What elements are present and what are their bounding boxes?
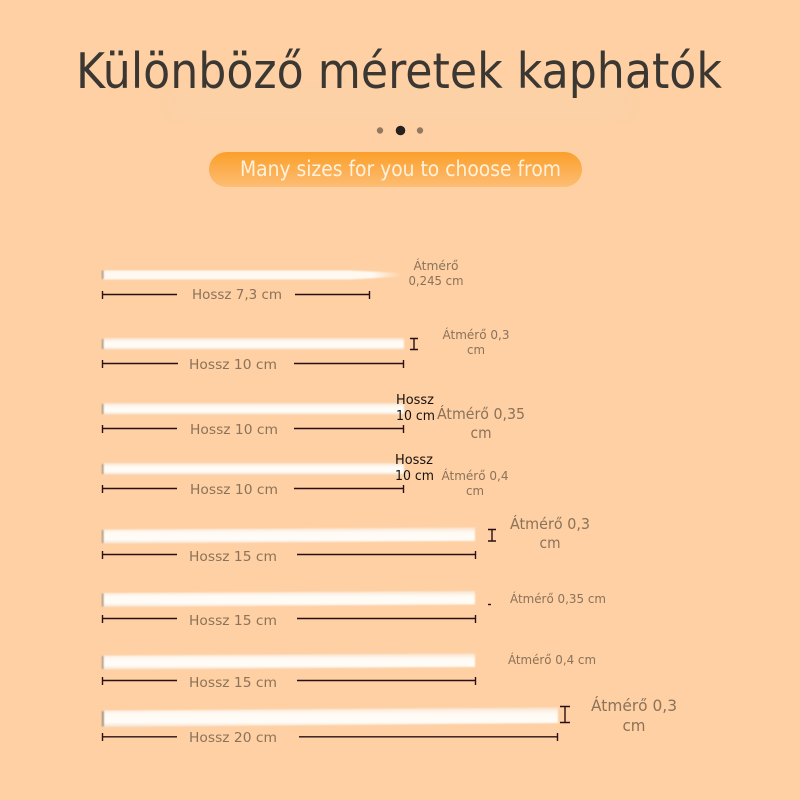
diameter label 8: Átmérő 0,3 bbox=[591, 696, 677, 715]
black length note 3: Hossz bbox=[396, 393, 434, 408]
row 5: 15 cm straw bbox=[102, 514, 590, 565]
diameter label 8: cm bbox=[622, 716, 646, 735]
diameter label 4: Átmérő 0,4 bbox=[442, 468, 509, 483]
title: Különböző méretek kaphatók bbox=[76, 43, 723, 100]
diameter label 5: cm bbox=[540, 534, 560, 552]
length bar 1 bbox=[102, 291, 370, 299]
diameter label 2: Átmérő 0,3 bbox=[442, 327, 510, 342]
diameter label 5: Átmérő 0,3 bbox=[510, 514, 590, 533]
length bar 8 bbox=[102, 733, 558, 741]
length bar 7 bbox=[102, 677, 476, 685]
straw 4 bbox=[102, 463, 404, 474]
straw 3 bbox=[102, 403, 404, 414]
diameter label 2: cm bbox=[467, 342, 485, 357]
diameter label 7: Átmérő 0,4 cm bbox=[508, 652, 596, 667]
subtitle pill bbox=[209, 152, 582, 187]
straw 5 bbox=[102, 528, 475, 544]
length bar 2 bbox=[102, 360, 404, 368]
diameter marker 8 bbox=[560, 706, 570, 722]
black length note 4: Hossz bbox=[395, 453, 433, 468]
diameter marker 2 bbox=[410, 338, 418, 350]
straw 8 bbox=[102, 708, 558, 727]
length bar 5 bbox=[102, 551, 476, 559]
diameter label 3: Átmérő 0,35 bbox=[437, 404, 525, 423]
diameter label 1: Átmérő bbox=[414, 258, 458, 273]
row 1: 7.3 cm straw bbox=[102, 258, 464, 303]
diameter label 6: Átmérő 0,35 cm bbox=[510, 591, 606, 606]
length label 7: Hossz 15 cm bbox=[189, 676, 277, 691]
length label 5: Hossz 15 cm bbox=[189, 550, 277, 565]
row 4: 10 cm straw bbox=[102, 453, 509, 498]
length label 6: Hossz 15 cm bbox=[189, 614, 277, 629]
length bar 4 bbox=[102, 485, 404, 493]
title backdrop bbox=[170, 85, 630, 120]
diameter marker 6 bbox=[488, 604, 491, 606]
length label 8: Hossz 20 cm bbox=[189, 731, 277, 746]
row 7: 15 cm straw bbox=[102, 652, 596, 691]
straw 6 bbox=[102, 591, 475, 607]
diameter label 3: cm bbox=[470, 424, 492, 442]
diameter label 1: 0,245 cm bbox=[408, 273, 464, 288]
row 3: 10 cm straw bbox=[102, 393, 525, 442]
length bar 6 bbox=[102, 615, 476, 623]
straw 1 bbox=[102, 270, 402, 280]
row 6: 15 cm straw bbox=[102, 591, 606, 629]
length label 4: Hossz 10 cm bbox=[190, 483, 278, 498]
diameter label 4: cm bbox=[466, 483, 484, 498]
pagination dots bbox=[377, 126, 423, 135]
row 8: 20 cm straw bbox=[102, 696, 677, 746]
straw 2 bbox=[102, 338, 404, 350]
subtitle pill: Many sizes for you to choose from bbox=[240, 157, 561, 181]
black length note 3: 10 cm bbox=[396, 409, 435, 424]
length label 3: Hossz 10 cm bbox=[190, 423, 278, 438]
straw 7 bbox=[102, 654, 475, 670]
length label 2: Hossz 10 cm bbox=[189, 358, 277, 373]
row 2: 10 cm straw bbox=[102, 327, 510, 373]
length label 1: Hossz 7,3 cm bbox=[192, 288, 282, 303]
diameter marker 5 bbox=[488, 530, 496, 541]
black length note 4: 10 cm bbox=[395, 469, 434, 484]
length bar 3 bbox=[102, 425, 404, 433]
